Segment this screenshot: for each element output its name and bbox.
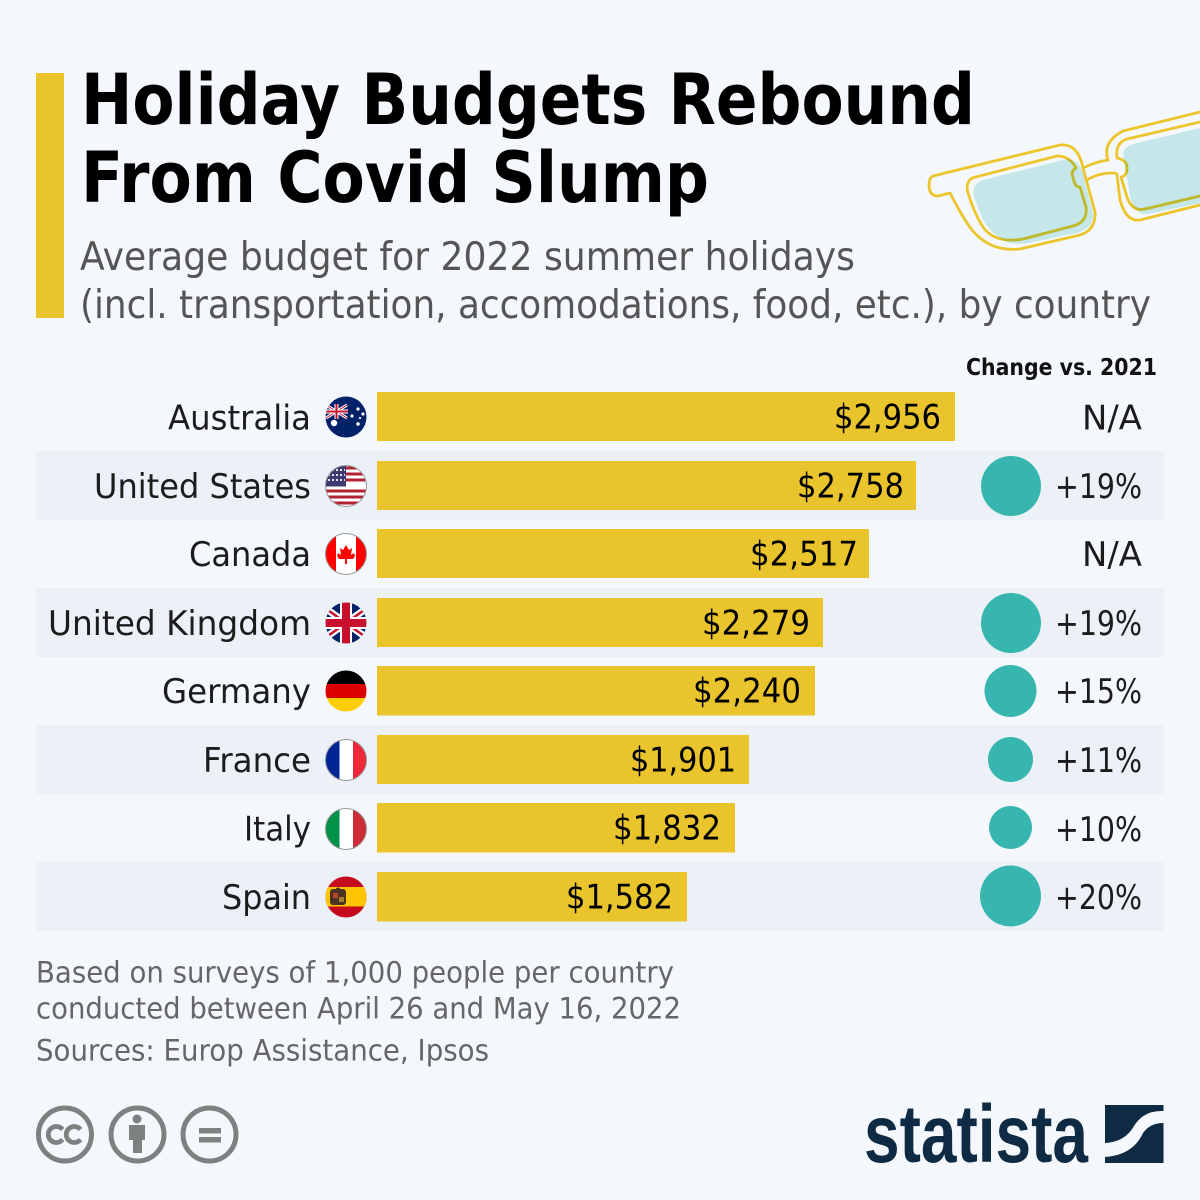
flag: France <box>325 739 367 781</box>
statista wordmark: statista <box>864 1089 1089 1180</box>
value: United States: $2,758 <box>797 466 904 506</box>
title: Holiday Budgets Rebound <box>81 59 975 141</box>
bar: United States <box>377 461 916 510</box>
change: Spain: +20% <box>1055 878 1142 918</box>
label: Italy: Italy <box>244 810 311 850</box>
icon: creative commons <box>38 1108 92 1161</box>
change: Canada: N/A <box>1082 535 1142 575</box>
footnote <box>36 956 681 1026</box>
flag: Spain <box>325 876 367 918</box>
change: France: +11% <box>1055 741 1142 781</box>
change: United States: +19% <box>1055 467 1142 507</box>
flag outline <box>326 466 366 506</box>
row: Canada <box>189 529 1142 578</box>
value: Italy: $1,832 <box>613 808 721 848</box>
change: United Kingdom: +19% <box>1055 604 1142 644</box>
bar: France <box>377 735 749 784</box>
footnote: Based on surveys of 1,000 people per country <box>36 956 674 990</box>
bar: Germany <box>377 666 815 716</box>
flag outline <box>326 534 366 574</box>
value: Germany: $2,240 <box>693 672 801 712</box>
bar: Spain <box>377 872 687 922</box>
bubble: Germany <box>984 665 1036 717</box>
row: United States <box>96 456 1140 516</box>
value: United Kingdom: $2,279 <box>702 604 810 644</box>
row: Italy <box>244 803 1142 852</box>
title accent bar <box>36 73 64 318</box>
title <box>81 59 975 219</box>
bubble: Italy <box>989 806 1032 849</box>
flag: United Kingdom <box>325 602 367 644</box>
value: France: $1,901 <box>630 740 736 780</box>
bar: United Kingdom <box>377 598 823 647</box>
icon: attribution <box>111 1108 164 1161</box>
row band <box>36 725 1164 794</box>
flag: Italy <box>325 808 367 850</box>
label: France: France <box>203 741 311 781</box>
value: Spain: $1,582 <box>566 878 673 918</box>
bar: Australia <box>377 392 955 441</box>
flag outline <box>326 808 366 850</box>
flag: United States <box>325 465 367 507</box>
flag: Australia <box>325 396 367 438</box>
value: Canada: $2,517 <box>750 534 858 574</box>
change: Australia: N/A <box>1082 398 1142 438</box>
row band <box>36 451 1164 520</box>
row: United Kingdom <box>50 593 1140 653</box>
label: Canada: Canada <box>189 535 311 575</box>
flag: Canada <box>325 533 367 575</box>
row: Spain <box>224 866 1140 926</box>
flag: Germany <box>325 670 367 712</box>
row: Australia <box>168 392 1142 441</box>
row band <box>36 588 1164 657</box>
icon: sunglasses <box>929 112 1200 249</box>
row band <box>36 862 1164 931</box>
row: France <box>206 735 1140 784</box>
change: Germany: +15% <box>1055 672 1142 712</box>
change: Italy: +10% <box>1055 810 1142 850</box>
bar: Italy <box>377 803 735 852</box>
footnote: conducted between April 26 and May 16, 2022 <box>36 992 681 1026</box>
value: Australia: $2,956 <box>834 398 941 438</box>
flag outline <box>326 740 366 780</box>
label: United States: United States <box>94 467 311 507</box>
sources: Sources: Europ Assistance, Ipsos <box>36 1034 489 1068</box>
label: Australia: Australia <box>168 398 311 438</box>
column header: change vs 2021: Change vs. 2021 <box>966 353 1157 381</box>
label: Spain: Spain <box>222 878 311 918</box>
bubble: United States <box>981 456 1041 516</box>
label: United Kingdom: United Kingdom <box>48 604 311 644</box>
title: From Covid Slump <box>81 137 709 219</box>
bubble: France <box>988 737 1033 782</box>
bar: Canada <box>377 529 869 578</box>
bubble: Spain <box>980 866 1041 926</box>
subtitle: Average budget for 2022 summer holidays <box>80 235 855 280</box>
subtitle <box>80 235 1151 328</box>
label: Germany: Germany <box>162 672 311 712</box>
icon: no derivatives <box>183 1108 236 1161</box>
bubble: United Kingdom <box>981 593 1041 653</box>
statista logo icon <box>1105 1105 1164 1163</box>
row: Germany <box>162 665 1142 717</box>
